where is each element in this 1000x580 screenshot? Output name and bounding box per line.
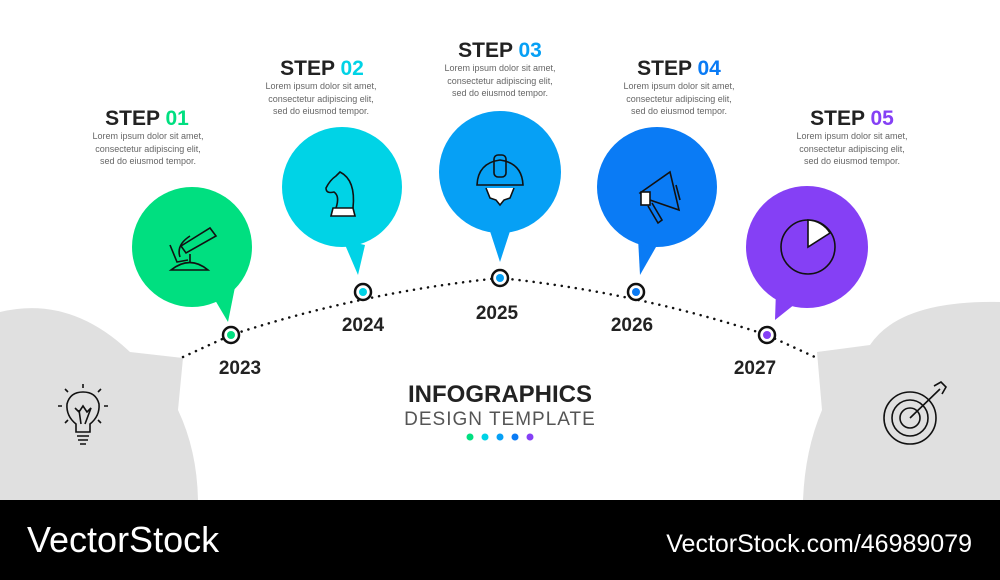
years: 2024 (342, 315, 385, 336)
step descriptions: sed do eiusmod tempor. (273, 106, 369, 116)
years: 2027 (734, 358, 776, 379)
step descriptions: sed do eiusmod tempor. (804, 156, 900, 166)
step descriptions: consectetur adipiscing elit, (626, 94, 732, 104)
step 5 bubble (746, 186, 868, 320)
icon: target (884, 382, 946, 444)
title (404, 381, 596, 440)
step descriptions: Lorem ipsum dolor sit amet, (623, 81, 735, 91)
title: INFOGRAPHICS (408, 381, 592, 408)
title: DESIGN TEMPLATE (404, 409, 596, 430)
icon: timer (781, 220, 835, 274)
footer: VectorStock (27, 519, 220, 560)
step descriptions: sed do eiusmod tempor. (452, 88, 548, 98)
icon: chess knight (326, 172, 355, 216)
years: 2023 (219, 358, 261, 379)
icon: light bulb (58, 384, 108, 444)
step descriptions: consectetur adipiscing elit, (95, 144, 201, 154)
gray shape: left (0, 308, 198, 500)
step headings: STEP 03 (458, 39, 542, 62)
years: 2026 (611, 315, 653, 336)
step descriptions (92, 63, 908, 166)
icon: microscope (170, 228, 216, 270)
dots (223, 270, 775, 343)
step descriptions: sed do eiusmod tempor. (100, 156, 196, 166)
icon: megaphone (640, 172, 680, 223)
step 3 bubble (439, 111, 561, 262)
step descriptions: Lorem ipsum dolor sit amet, (444, 63, 556, 73)
footer (0, 500, 1000, 580)
step 2 bubble (282, 127, 402, 275)
step descriptions: Lorem ipsum dolor sit amet, (796, 131, 908, 141)
step headings: STEP 02 (280, 57, 364, 80)
step 1 bubble (132, 187, 252, 322)
timeline arc (183, 278, 817, 358)
step headings: STEP 05 (810, 107, 894, 130)
years (219, 303, 776, 379)
step 4 bubble (597, 127, 717, 275)
step descriptions: Lorem ipsum dolor sit amet, (265, 81, 377, 91)
step descriptions: consectetur adipiscing elit, (447, 76, 553, 86)
years: 2025 (476, 303, 519, 324)
step descriptions: Lorem ipsum dolor sit amet, (92, 131, 204, 141)
step descriptions: sed do eiusmod tempor. (631, 106, 727, 116)
footer: VectorStock.com/46989079 (666, 530, 972, 558)
icon: helmet gear (477, 155, 523, 205)
gray shape: right (803, 302, 1000, 500)
step headings: STEP 01 (105, 107, 189, 130)
step headings (105, 39, 894, 130)
step descriptions: consectetur adipiscing elit, (799, 144, 905, 154)
step headings: STEP 04 (637, 57, 721, 80)
step descriptions: consectetur adipiscing elit, (268, 94, 374, 104)
